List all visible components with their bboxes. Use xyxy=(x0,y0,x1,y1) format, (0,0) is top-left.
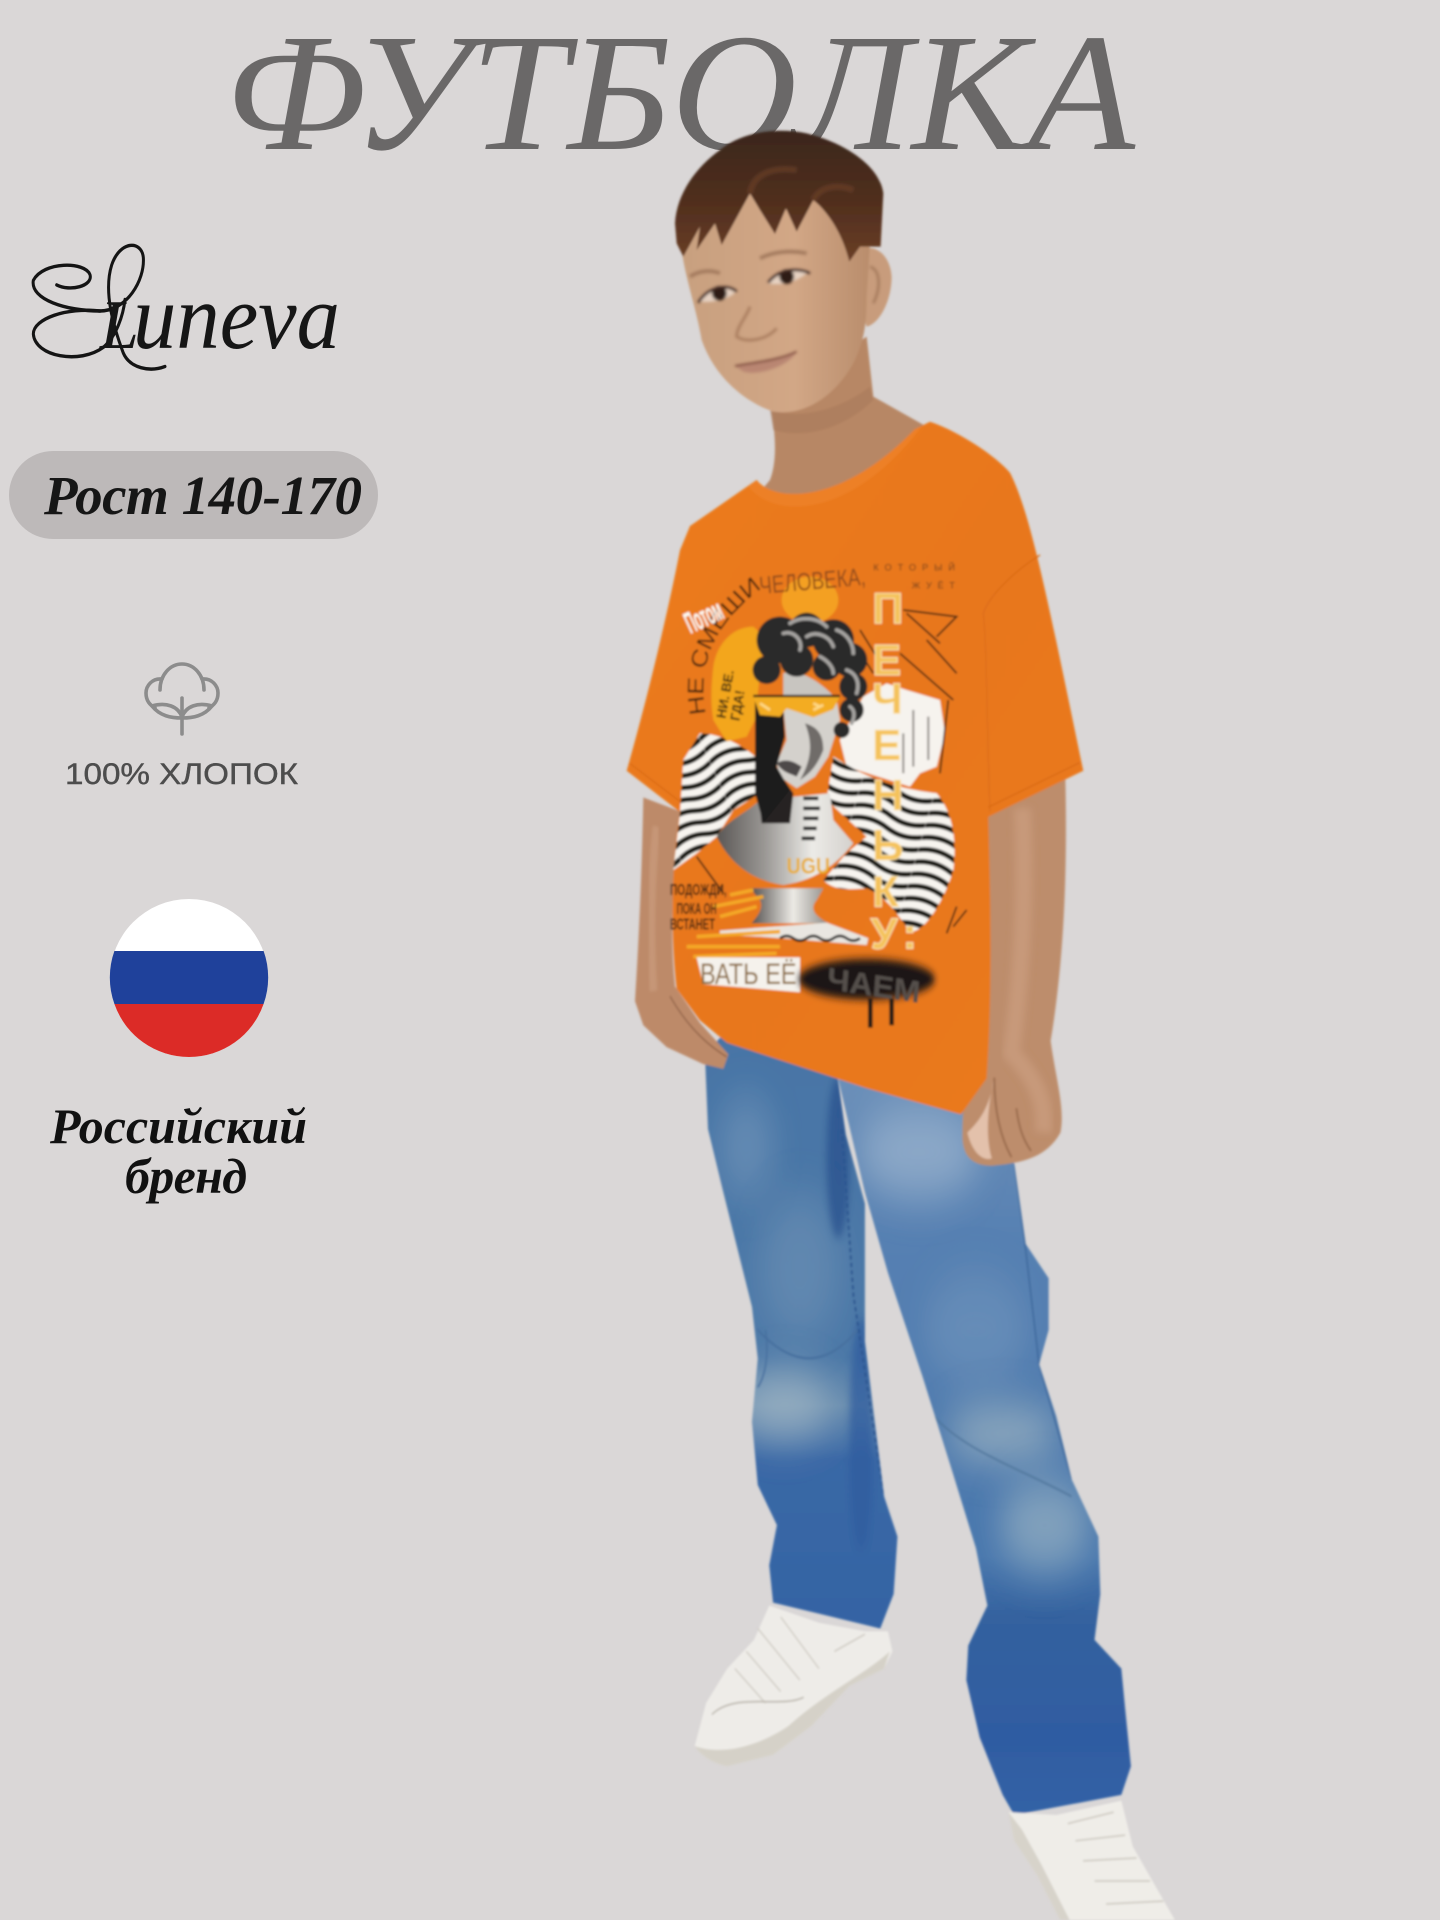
printed slogans: КОТОРЫЙ xyxy=(873,562,955,573)
white splash xyxy=(840,683,945,787)
black spray xyxy=(798,959,935,1028)
wave stripes left xyxy=(673,733,760,870)
mouth xyxy=(735,352,797,373)
left arm and hand xyxy=(635,797,728,1069)
neck xyxy=(753,337,927,502)
forehead xyxy=(783,672,837,700)
icon: russian flag xyxy=(110,899,268,1057)
shirt body xyxy=(627,422,1083,1114)
face xyxy=(682,177,870,412)
cotton label: 100% ХЛОПОК xyxy=(65,758,299,791)
jeans xyxy=(695,1026,1175,1920)
yellow tag: UGU xyxy=(787,853,830,878)
shirt print xyxy=(669,561,968,960)
right trouser leg xyxy=(832,1054,1131,1815)
yellow vertical word: П xyxy=(872,585,903,633)
bust xyxy=(717,613,867,885)
nose xyxy=(737,307,777,340)
yellow vertical word: У xyxy=(871,910,899,958)
head xyxy=(675,131,892,412)
face light xyxy=(777,700,840,788)
hair xyxy=(675,131,883,262)
printed slogans: НЕ СМЕШИ xyxy=(686,576,761,715)
title: ФУТБОЛКА xyxy=(225,0,1136,186)
right arm and hand xyxy=(962,778,1066,1166)
curls xyxy=(753,613,867,738)
logo: Luneva xyxy=(33,245,340,369)
speech bubble xyxy=(711,627,764,742)
ear xyxy=(857,248,892,327)
printed slogans: ЖУЁТ xyxy=(912,580,955,590)
t-shirt xyxy=(625,420,1085,1116)
shirt print: Потом xyxy=(679,593,728,640)
wave stripes right xyxy=(823,757,954,932)
printed slogans: ПОКА ОН xyxy=(677,901,717,918)
logo: Luneva: uneva xyxy=(133,266,340,368)
speech bubble: ГДА! xyxy=(727,689,747,722)
yellow vertical word: Е xyxy=(872,722,901,770)
yellow vertical word: Е xyxy=(872,637,901,685)
shirt hem print: ВАТЬ ЕЁ xyxy=(700,958,797,991)
yellow vertical word: К xyxy=(872,869,899,917)
brand caption: Российский xyxy=(49,1098,307,1154)
yellow vertical word: Ч xyxy=(872,675,903,723)
speech bubble: НИ. ВЕ. xyxy=(714,669,737,720)
white strip xyxy=(697,957,800,992)
shoulders xyxy=(717,793,853,885)
left shoe xyxy=(695,1605,892,1766)
black spray: ЧАЕМ xyxy=(826,961,921,1010)
infographic page xyxy=(9,38,1174,1920)
eyes xyxy=(690,252,810,303)
height badge xyxy=(9,451,378,539)
yellow vertical word: Н xyxy=(872,772,904,820)
shirt hem print xyxy=(697,957,935,1028)
logo: Luneva: L xyxy=(99,287,139,364)
pedestal xyxy=(720,888,868,945)
brand caption: бренд xyxy=(125,1148,247,1204)
paint scribble xyxy=(687,890,780,957)
printed slogans: ЧЕЛОВЕКА, xyxy=(758,564,867,600)
yellow vertical word: : xyxy=(903,910,917,958)
printed slogans: ПОДОЖДИ, xyxy=(670,882,727,899)
face shadow xyxy=(755,700,790,823)
scratches xyxy=(697,610,967,933)
yellow paint blob xyxy=(782,577,838,623)
yellow vertical word: Ь xyxy=(872,822,903,870)
left trouser leg xyxy=(705,1026,897,1628)
printed slogans xyxy=(669,561,956,933)
neck shadow xyxy=(755,760,793,823)
printed slogans: ВСТАНЕТ xyxy=(670,916,715,933)
brand caption xyxy=(49,1098,307,1204)
figure: boy xyxy=(625,129,1174,1920)
icon: cotton xyxy=(146,664,218,734)
sunglasses xyxy=(753,696,840,717)
height badge: Рост 140-170 xyxy=(43,465,362,526)
right shoe xyxy=(1008,1801,1175,1920)
